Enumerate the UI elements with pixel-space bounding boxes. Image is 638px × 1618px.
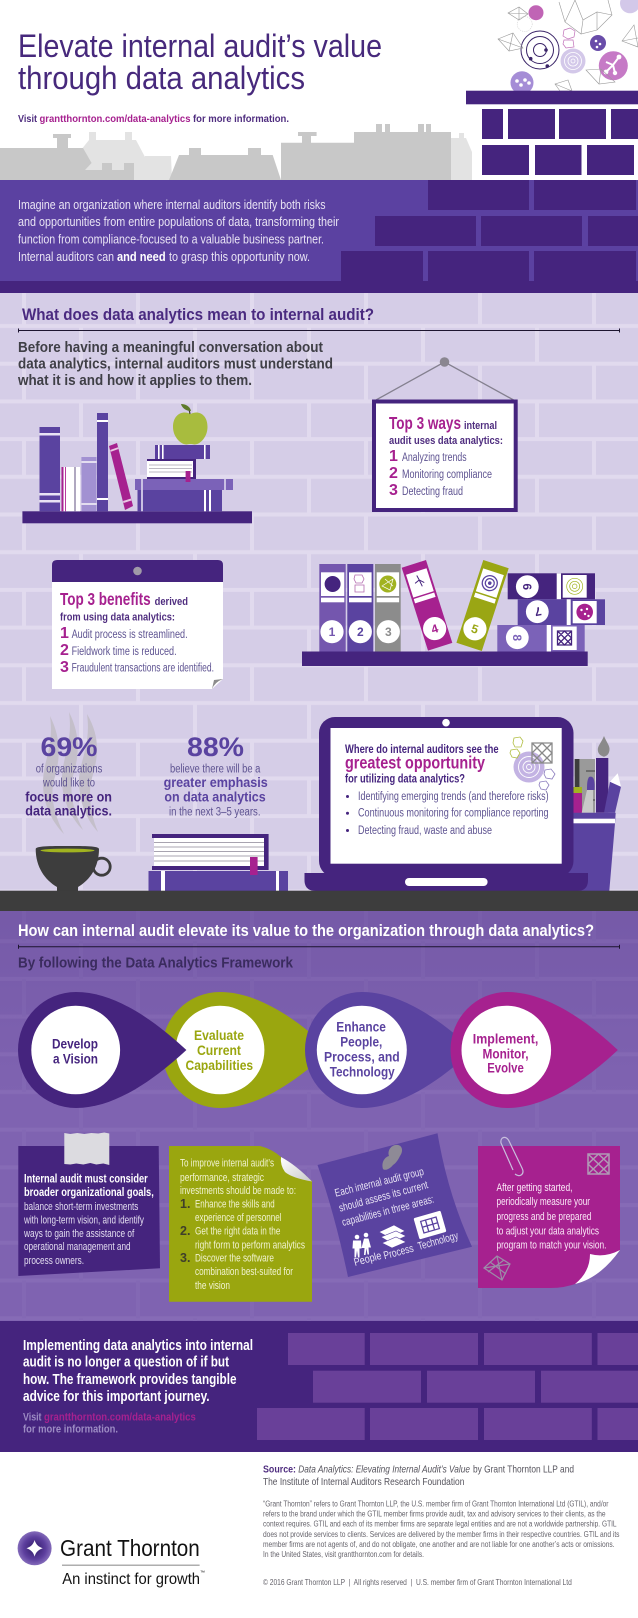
panel: note improve performance: performance, strategic — [180, 1172, 264, 1184]
panel: note develop vision: operational management and — [24, 1241, 131, 1253]
visit link line: for more information. — [193, 113, 289, 125]
panel: note develop vision: Internal audit must consider — [24, 1172, 148, 1186]
step 4: implement monitor evolve: Implement, — [473, 1031, 538, 1046]
lead paragraph: data analytics, internal auditors must understand — [18, 356, 333, 372]
icon: wire square — [588, 1154, 609, 1174]
panel: note top 3 benefits: 1 — [60, 625, 69, 642]
step 3: enhance people process technology: Process, and — [324, 1050, 400, 1065]
title: Elevate internal audit’s value — [18, 28, 382, 64]
panel: note top 3 benefits: Fieldwork time is reduced. — [72, 646, 177, 658]
icon: technology chip — [414, 1211, 446, 1239]
source citation: The Institute of Internal Auditors Research Foundation — [263, 1476, 465, 1488]
panel: note measure progress: After getting started, — [496, 1182, 572, 1194]
step 1: develop a vision — [18, 992, 186, 1108]
panel: note improve performance: 1. — [180, 1197, 190, 1211]
illustration: numbered binders on shelf — [302, 560, 605, 666]
binder 7: 7 — [533, 604, 543, 619]
intro paragraph: function from compliance-focused to a valuable business partner. — [18, 232, 324, 246]
legal fine print — [263, 1500, 620, 1559]
panel: hanging picture top 3 ways: audit uses data analytics: — [389, 435, 503, 447]
panel: note improve performance: To improve internal audit’s — [180, 1158, 274, 1170]
panel: note improve performance: investments should be made to: — [180, 1185, 296, 1197]
panel: note measure progress: progress and be prepared — [496, 1211, 591, 1223]
panel: note improve performance: 3. — [180, 1251, 190, 1265]
panel: note measure progress: to adjust your data analytics — [496, 1225, 599, 1237]
stat: 88 percent: greater emphasis — [164, 775, 268, 790]
subheading: by following the framework: By following the Data Analytics Framework — [18, 955, 294, 972]
stat: 69 percent: 69% — [40, 732, 98, 762]
panel: note top 3 benefits: Top 3 benefits — [60, 589, 151, 609]
panel: note improve performance: right form to perform analytics — [195, 1239, 305, 1251]
panel: note top 3 benefits — [52, 560, 223, 689]
panel: note improve performance: the vision — [195, 1280, 230, 1292]
stat: 69 percent: would like to — [42, 778, 95, 790]
binder 7 — [518, 599, 605, 625]
visit link line: grantthornton.com/data-analytics — [40, 113, 191, 125]
panel: hanging picture top 3 ways: internal — [464, 420, 497, 432]
binder 2 — [347, 564, 373, 652]
intro paragraph — [18, 198, 339, 264]
panel: note develop vision: with long-term vision, and identify — [23, 1214, 144, 1226]
logo: Grant Thornton — [18, 1531, 205, 1588]
panel: note top 3 benefits: Fraudulent transactions are identified. — [72, 663, 214, 675]
panel: hanging picture top 3 ways: Analyzing trends — [402, 452, 467, 464]
panel: laptop greatest opportunity: Continuous monitoring for compliance reporting — [358, 808, 549, 820]
step 4: implement monitor evolve: Evolve — [487, 1061, 524, 1076]
binder 3: 3 — [385, 625, 392, 639]
binder 6: 6 — [520, 583, 534, 590]
panel: note develop vision: ways to gain the assistance of — [23, 1228, 135, 1240]
background: lavender brick wall — [0, 293, 638, 891]
title: through data analytics — [18, 60, 305, 96]
logo: Grant Thornton: An instinct for growth — [62, 1571, 200, 1588]
panel: note improve performance: combination best-suited for — [195, 1266, 293, 1278]
panel: note improve performance: Discover the software — [195, 1253, 274, 1265]
panel: note top 3 benefits: from using data analytics: — [60, 612, 175, 624]
panel: note assess capabilities: should assess its current — [338, 1179, 429, 1215]
binder 2: 2 — [357, 625, 364, 639]
step 2: evaluate current capabilities: Capabilities — [186, 1058, 253, 1073]
panel: closing band — [0, 1321, 638, 1452]
legal fine print: In the United States, visit grantthornton.com for details. — [263, 1550, 424, 1559]
intro paragraph: Imagine an organization where internal auditors identify both risks — [18, 198, 326, 212]
binder 4: 4 — [429, 621, 440, 637]
stat: 69 percent: data analytics. — [25, 804, 112, 819]
panel: hanging picture top 3 ways: Detecting fraud — [402, 486, 463, 498]
background: wall shading — [0, 911, 638, 1321]
panel: hanging picture top 3 ways: Top 3 ways — [389, 413, 461, 433]
step 2: evaluate current capabilities: Current — [197, 1043, 241, 1058]
icon: process stack — [379, 1225, 406, 1248]
panel: note top 3 benefits: derived — [155, 596, 188, 608]
illustration: pen cup — [565, 736, 621, 891]
panel: note assess capabilities: People — [353, 1250, 383, 1269]
panel: note top 3 benefits: Audit process is streamlined. — [72, 629, 188, 641]
binder 1 — [319, 564, 346, 652]
binder 6 — [508, 573, 595, 599]
intro paragraph: and opportunities from entire populations of data, transforming their — [18, 215, 339, 229]
binder 8 — [497, 625, 585, 652]
panel: laptop greatest opportunity: greatest opportunity — [345, 752, 485, 772]
visit link line: Visit — [18, 113, 37, 125]
panel: note improve performance: Enhance the skills and — [195, 1199, 275, 1211]
panel: note develop vision: balance short-term investments — [24, 1201, 139, 1213]
panel: note assess capabilities: capabilities in three areas: — [341, 1194, 435, 1229]
panel: note measure progress — [478, 1137, 620, 1288]
panel: note measure progress: program to match your vision. — [496, 1240, 606, 1252]
panel: note assess capabilities: Process — [382, 1243, 415, 1262]
stat: 69 percent: of organizations — [36, 764, 103, 776]
panel: note assess capabilities — [318, 1133, 472, 1277]
panel: laptop greatest opportunity: Where do internal auditors see the — [345, 744, 499, 756]
stat: 88 percent: believe there will be a — [170, 764, 261, 776]
panel: hanging picture top 3 ways: 2 — [389, 465, 398, 482]
icon: wire polygon — [484, 1256, 510, 1280]
closing link: for more information. — [23, 1424, 118, 1436]
panel: hanging picture top 3 ways: 1 — [389, 448, 398, 465]
lead paragraph: what it is and how it applies to them. — [17, 372, 252, 389]
panel: note improve performance: experience of personnel — [195, 1212, 282, 1224]
logo: Grant Thornton: Grant Thornton — [60, 1535, 200, 1561]
step 2: evaluate current capabilities — [162, 992, 330, 1108]
panel: laptop greatest opportunity: Detecting fraud, waste and abuse — [358, 825, 492, 837]
closing statement: Implementing data analytics into internal — [23, 1338, 253, 1354]
binder 8: 8 — [510, 634, 524, 641]
parapet and dark bricks top right — [466, 91, 638, 175]
desk shelf — [0, 891, 638, 911]
panel: note improve performance — [169, 1146, 312, 1302]
tape — [64, 1132, 109, 1165]
heading: what does data analytics mean: What does data analytics mean to internal audit? — [22, 305, 374, 324]
visit link line — [18, 113, 289, 125]
binder 5 — [456, 560, 509, 651]
panel: note develop vision: broader organizational goals, — [24, 1185, 154, 1199]
lead paragraph — [17, 339, 333, 389]
panel: note top 3 benefits: 2 — [60, 642, 69, 659]
closing link: grantthornton.com/data-analytics — [44, 1412, 196, 1424]
panel: note measure progress: periodically measure your — [496, 1196, 590, 1208]
step 3: enhance people process technology: Technology — [330, 1065, 395, 1080]
step 3: enhance people process technology — [305, 992, 473, 1108]
stat: 69 percent — [25, 732, 112, 819]
panel: note assess capabilities: Technology — [417, 1230, 460, 1253]
icon: pin — [382, 1145, 402, 1170]
stat: 88 percent: in the next 3–5 years. — [169, 807, 260, 819]
panel: note top 3 benefits: 3 — [60, 659, 69, 676]
intro paragraph: to grasp this opportunity now. — [169, 250, 310, 264]
closing statement: audit is no longer a question of if but — [23, 1355, 229, 1371]
step 2: evaluate current capabilities: Evaluate — [194, 1028, 244, 1043]
binder 1: 1 — [329, 625, 336, 639]
panel: laptop greatest opportunity — [304, 717, 588, 891]
panel: hanging picture top 3 ways — [374, 357, 516, 510]
step 1: develop a vision: a Vision — [53, 1051, 98, 1066]
icon: people — [352, 1233, 371, 1258]
stat: 88 percent — [164, 732, 268, 819]
panel: note develop vision — [18, 1132, 160, 1276]
panel: intro band — [0, 180, 638, 293]
icon: paperclip — [501, 1137, 523, 1176]
closing statement: advice for this important journey. — [23, 1389, 210, 1405]
closing link: Visit — [23, 1412, 42, 1424]
source citation: Data Analytics: Elevating Internal Audit’s Value — [298, 1464, 470, 1476]
source citation — [263, 1464, 574, 1488]
step 4: implement monitor evolve: Monitor, — [482, 1046, 528, 1061]
panel: note assess capabilities: Each internal audit group — [334, 1166, 425, 1200]
lead paragraph: Before having a meaningful conversation about — [18, 339, 323, 356]
source citation: by Grant Thornton LLP and — [473, 1464, 574, 1476]
icon: apple — [173, 413, 208, 445]
panel: hanging picture top 3 ways: 3 — [389, 482, 398, 499]
source citation: Source: — [263, 1464, 296, 1476]
panel: hanging picture top 3 ways: Monitoring compliance — [402, 469, 492, 481]
title — [18, 28, 382, 96]
panel: laptop greatest opportunity: Identifying emerging trends (and therefore risks) — [358, 791, 549, 803]
step 1: develop a vision: Develop — [52, 1036, 98, 1051]
intro paragraph: Internal auditors can — [18, 250, 114, 264]
step 4: implement monitor evolve — [451, 992, 618, 1108]
intro paragraph: and need — [117, 250, 166, 264]
decoration: data icons cluster top right — [498, 0, 638, 94]
skyline silhouette — [0, 124, 472, 180]
panel: laptop greatest opportunity: for utilizing data analytics? — [345, 774, 465, 786]
stat: 88 percent: on data analytics — [164, 790, 266, 805]
step 3: enhance people process technology: Enhance — [336, 1020, 386, 1035]
binder 3 — [375, 564, 401, 652]
icon: target and cubes — [510, 737, 555, 790]
icon: coffee cup — [36, 846, 110, 891]
panel: note improve performance: Get the right data in the — [195, 1226, 280, 1238]
stat: 69 percent: focus more on — [25, 790, 112, 805]
binder 5: 5 — [469, 621, 480, 637]
closing statement: how. The framework provides tangible — [23, 1372, 236, 1388]
icon: steam — [43, 712, 98, 834]
closing link — [23, 1412, 196, 1436]
illustration: bookshelf with apple — [22, 404, 252, 523]
logo: Grant Thornton: ™ — [200, 1570, 205, 1576]
binder 4 — [402, 560, 452, 651]
framework: teardrop process — [18, 992, 618, 1108]
illustration: stacked books on desk — [148, 834, 288, 891]
panel: note improve performance: 2. — [180, 1224, 190, 1238]
panel: note develop vision: process owners. — [24, 1255, 84, 1267]
stat: 88 percent: 88% — [187, 732, 244, 762]
step 3: enhance people process technology: People, — [340, 1035, 382, 1050]
closing statement — [23, 1338, 253, 1405]
background: purple brick wall — [0, 911, 638, 1321]
